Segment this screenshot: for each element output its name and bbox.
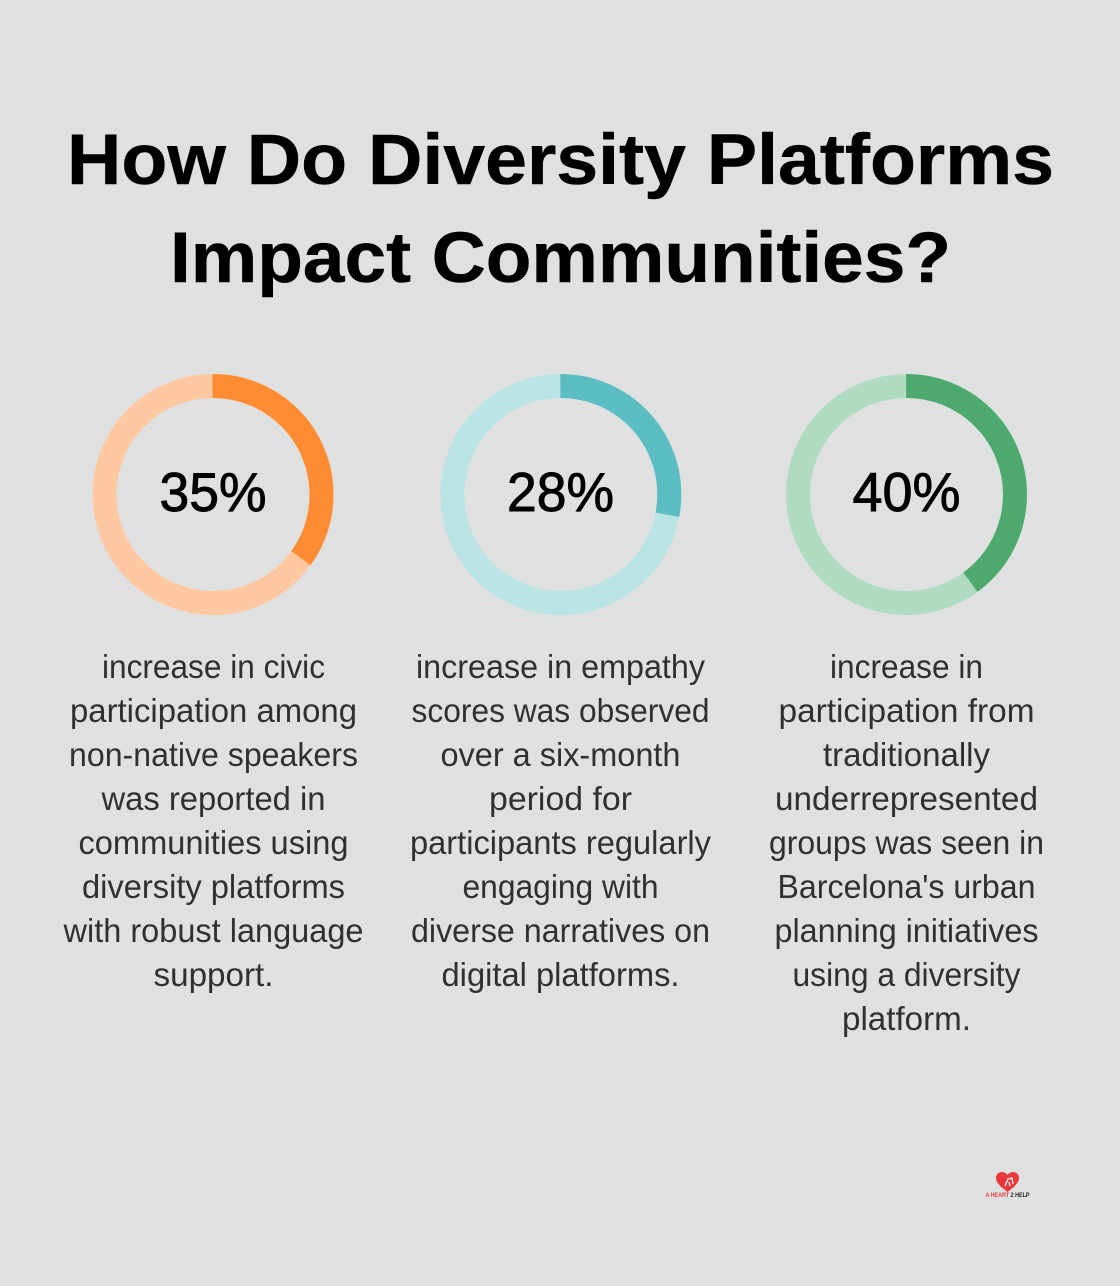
text block: underrepresented groups description [769,648,1044,1037]
panel: civic participation [63,386,364,993]
donut chart: 35%: 35% [160,461,266,523]
text block: civic participation description: was reported in [101,780,326,817]
text block: empathy scores description: participants regularly [410,824,711,861]
donut chart: 40% [798,386,1015,603]
text block: civic participation description: support. [154,956,274,993]
text block: empathy scores description: increase in empathy [416,648,705,685]
logo: A Heart 2 Help [986,1172,1030,1199]
text block: civic participation description: increase in civic [102,648,325,685]
panel: empathy scores [410,386,711,993]
title: How Do Diversity Platforms [67,120,1054,200]
panel: underrepresented groups [769,386,1044,1037]
text block: empathy scores description: diverse narratives on [411,912,710,949]
text block: civic participation description [63,648,364,993]
text block: empathy scores description: engaging with [462,868,658,905]
donut chart: 28% [452,386,669,603]
icon: heart [996,1172,1019,1192]
text block: underrepresented groups description: Barcelona's urban [778,868,1036,905]
text block: underrepresented groups description: planning initiatives [774,912,1038,949]
text block: empathy scores description: period for [489,780,632,817]
donut chart: 40%: 40% [852,461,960,523]
text block: civic participation description: diversity platforms [82,868,345,905]
text block: empathy scores description: scores was observed [412,692,710,729]
text block: underrepresented groups description: traditionally [823,736,990,773]
text block: underrepresented groups description: increase in [830,648,983,685]
text block: underrepresented groups description: groups was seen in [769,824,1044,861]
text block: empathy scores description [410,648,711,993]
text block: underrepresented groups description: using a diversity [792,956,1021,993]
text block: civic participation description: with robust language [63,912,364,949]
title [67,120,1054,298]
text block: civic participation description: non-native speakers [69,736,358,773]
text block: empathy scores description: over a six-month [440,736,680,773]
donut chart: 28%: 28% [507,461,614,523]
donut chart: 35% [104,386,322,603]
text block: underrepresented groups description: underrepresented [775,780,1038,817]
text block: civic participation description: communities using [78,824,348,861]
text block: empathy scores description: digital platforms. [442,956,680,993]
logo: A Heart 2 Help: A HEART 2 HELP [986,1193,1030,1199]
text block: underrepresented groups description: participation from [778,692,1034,729]
text block: underrepresented groups description: platform. [842,1000,971,1037]
title: Impact Communities? [170,218,951,298]
text block: civic participation description: participation among [70,692,357,729]
